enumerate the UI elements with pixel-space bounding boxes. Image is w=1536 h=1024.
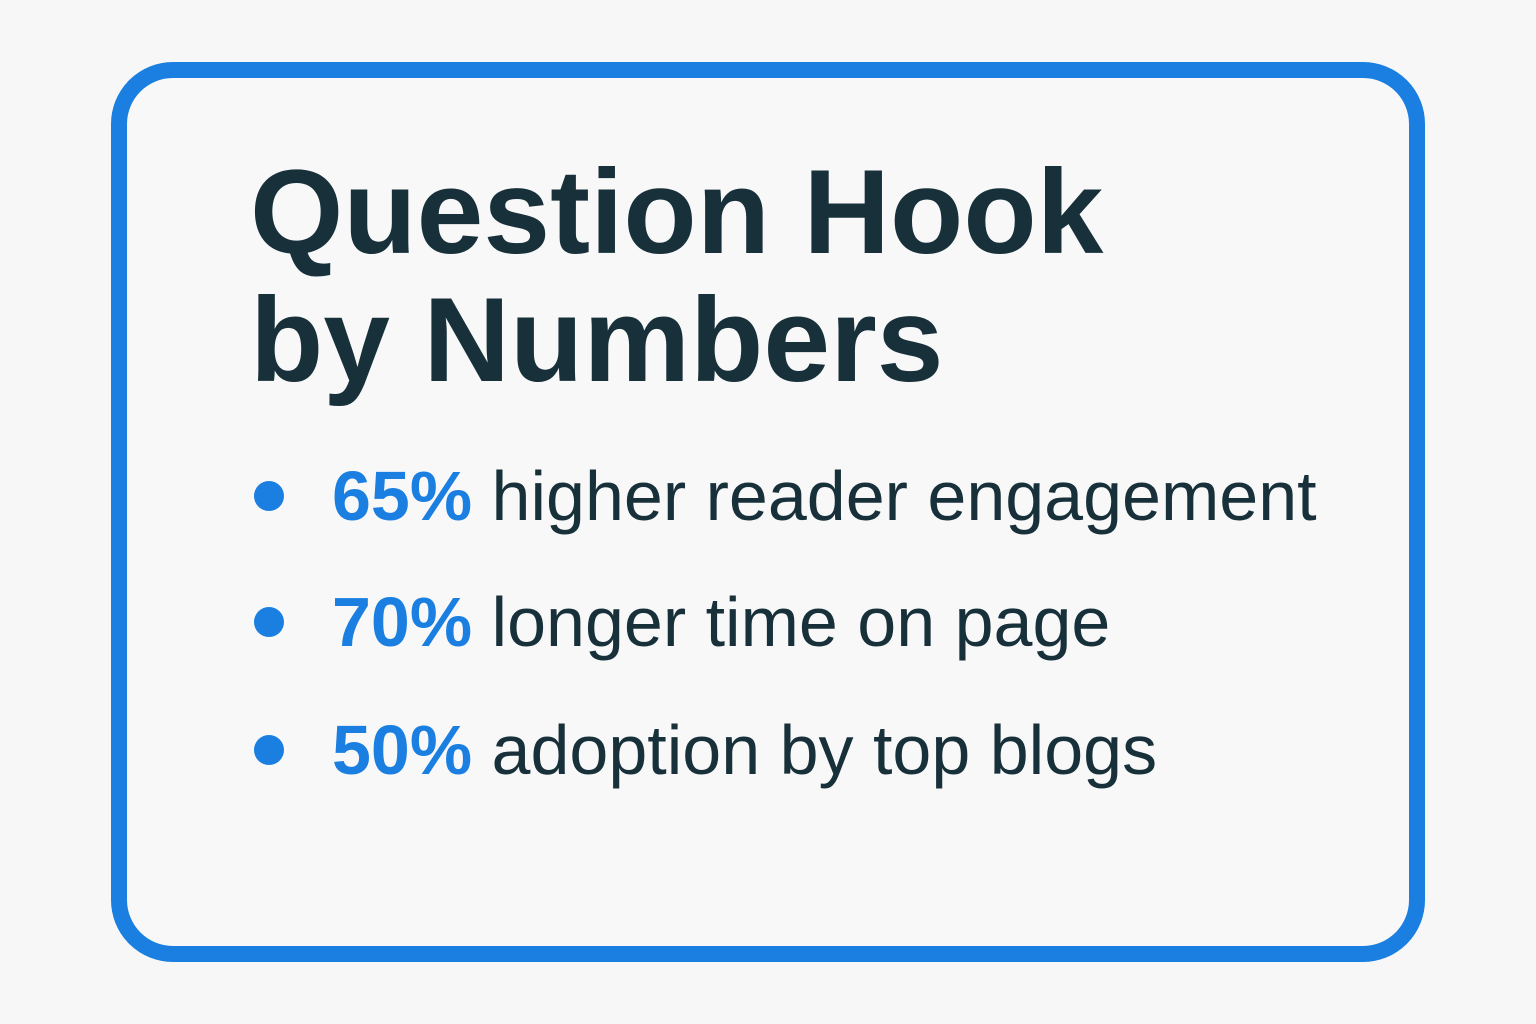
title [250, 145, 1104, 407]
text: 65% higher reader engagement: 65% higher reader engagement [332, 457, 1317, 535]
bullet: 50% [254, 711, 1157, 789]
panel: frame [111, 62, 1425, 962]
icon: bullet dot [254, 735, 284, 765]
icon: bullet dot [254, 481, 284, 511]
icon: bullet dot [254, 607, 284, 637]
text: 70% longer time on page: 70% longer time on page [332, 583, 1110, 661]
bullet: 70% [254, 583, 1110, 661]
title: by Numbers [250, 273, 944, 407]
title: Question Hook [250, 145, 1103, 279]
bullet: 65% [254, 457, 1317, 535]
text: 50% adoption by top blogs: 50% adoption by top blogs [332, 711, 1157, 789]
